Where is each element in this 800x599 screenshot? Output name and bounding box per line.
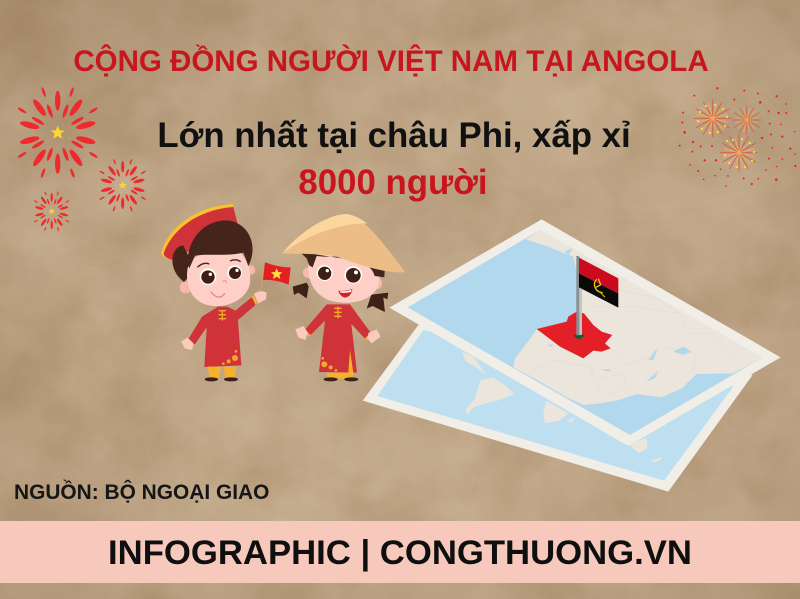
map: land mass <box>513 230 762 405</box>
girl: pigtails <box>293 283 388 312</box>
girl: head <box>300 252 385 303</box>
girl: robe <box>303 304 372 381</box>
subtitle: largest in Africa: Lớn nhất tại châu Phi, xấp xỉ <box>157 116 631 155</box>
title: CỘNG ĐỒNG NGƯỜI VIỆT NAM TẠI ANGOLA <box>73 45 709 78</box>
boy: head <box>172 220 255 306</box>
boy: robe <box>187 295 258 381</box>
highlighted figure: 8000 people: 8000 người <box>298 163 488 202</box>
footer brand text: INFOGRAPHIC | CONGTHUONG.VN <box>108 534 692 572</box>
map: Angola in red <box>537 312 612 358</box>
footer banner <box>0 521 800 583</box>
boy: hat <box>161 204 238 260</box>
map: front Africa map sheet <box>390 219 780 446</box>
map: back world map sheet <box>362 325 752 492</box>
girl: conical hat <box>282 214 405 272</box>
boy: flag <box>261 262 291 292</box>
source credit: NGUỒN: BỘ NGOẠI GIAO <box>14 481 269 504</box>
girl: hands <box>295 326 381 343</box>
map: Angola flag on pole <box>573 256 618 339</box>
boy: hands <box>181 291 267 350</box>
